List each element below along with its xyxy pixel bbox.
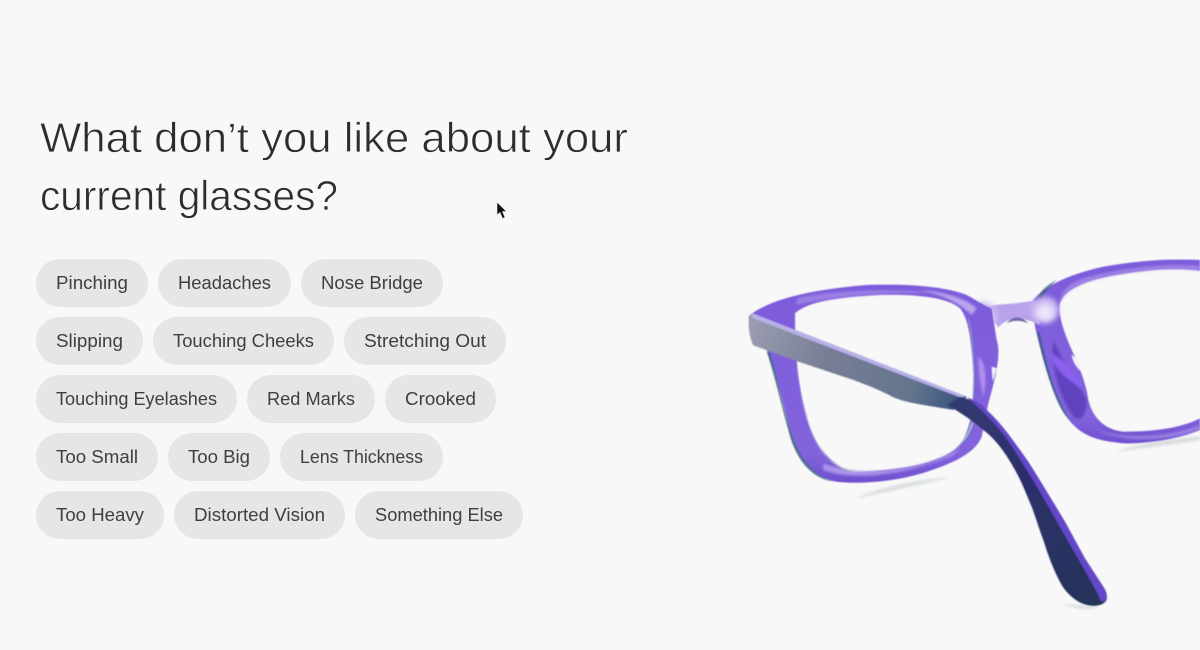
chip: Too Big: Too Big xyxy=(188,447,250,467)
chip: Crooked xyxy=(385,375,496,423)
option chips xyxy=(36,259,523,539)
chip: Something Else: Something Else xyxy=(375,505,503,525)
chip: Headaches: Headaches xyxy=(178,273,271,293)
chip: Distorted Vision: Distorted Vision xyxy=(194,505,325,525)
chip: Nose Bridge: Nose Bridge xyxy=(321,273,423,293)
chip: Pinching xyxy=(36,259,148,307)
icon: mouse cursor xyxy=(497,202,506,218)
chip: Slipping xyxy=(36,317,143,365)
chip: Lens Thickness: Lens Thickness xyxy=(300,447,423,467)
chip: Red Marks xyxy=(247,375,375,423)
chip: Crooked: Crooked xyxy=(405,389,476,409)
chip: Nose Bridge xyxy=(301,259,443,307)
left lens frame xyxy=(750,285,998,483)
chip: Touching Cheeks: Touching Cheeks xyxy=(173,331,314,351)
chip: Pinching: Pinching xyxy=(56,273,128,293)
title xyxy=(40,114,628,219)
chip: Red Marks: Red Marks xyxy=(267,389,355,409)
chip: Stretching Out: Stretching Out xyxy=(364,331,486,351)
temple arm xyxy=(749,313,1107,606)
chip: Stretching Out xyxy=(344,317,506,365)
chip: Headaches xyxy=(158,259,291,307)
chip: Something Else xyxy=(355,491,523,539)
chip: Too Small: Too Small xyxy=(56,447,138,467)
chip: Slipping: Slipping xyxy=(56,331,123,351)
chip: Touching Cheeks xyxy=(153,317,334,365)
right lens frame xyxy=(1032,259,1200,443)
title: current glasses? xyxy=(40,172,338,219)
chip: Touching Eyelashes xyxy=(36,375,237,423)
illustration: purple glasses xyxy=(749,259,1200,609)
frame shadows xyxy=(857,437,1200,609)
chip: Too Big xyxy=(168,433,270,481)
chip: Too Heavy: Too Heavy xyxy=(56,505,144,525)
title: What don’t you like about your xyxy=(40,114,628,161)
chip: Distorted Vision xyxy=(174,491,345,539)
chip: Too Small xyxy=(36,433,158,481)
chip: Too Heavy xyxy=(36,491,164,539)
chip: Touching Eyelashes: Touching Eyelashes xyxy=(56,389,217,409)
nose bridge xyxy=(970,297,1059,329)
chip: Lens Thickness xyxy=(280,433,443,481)
